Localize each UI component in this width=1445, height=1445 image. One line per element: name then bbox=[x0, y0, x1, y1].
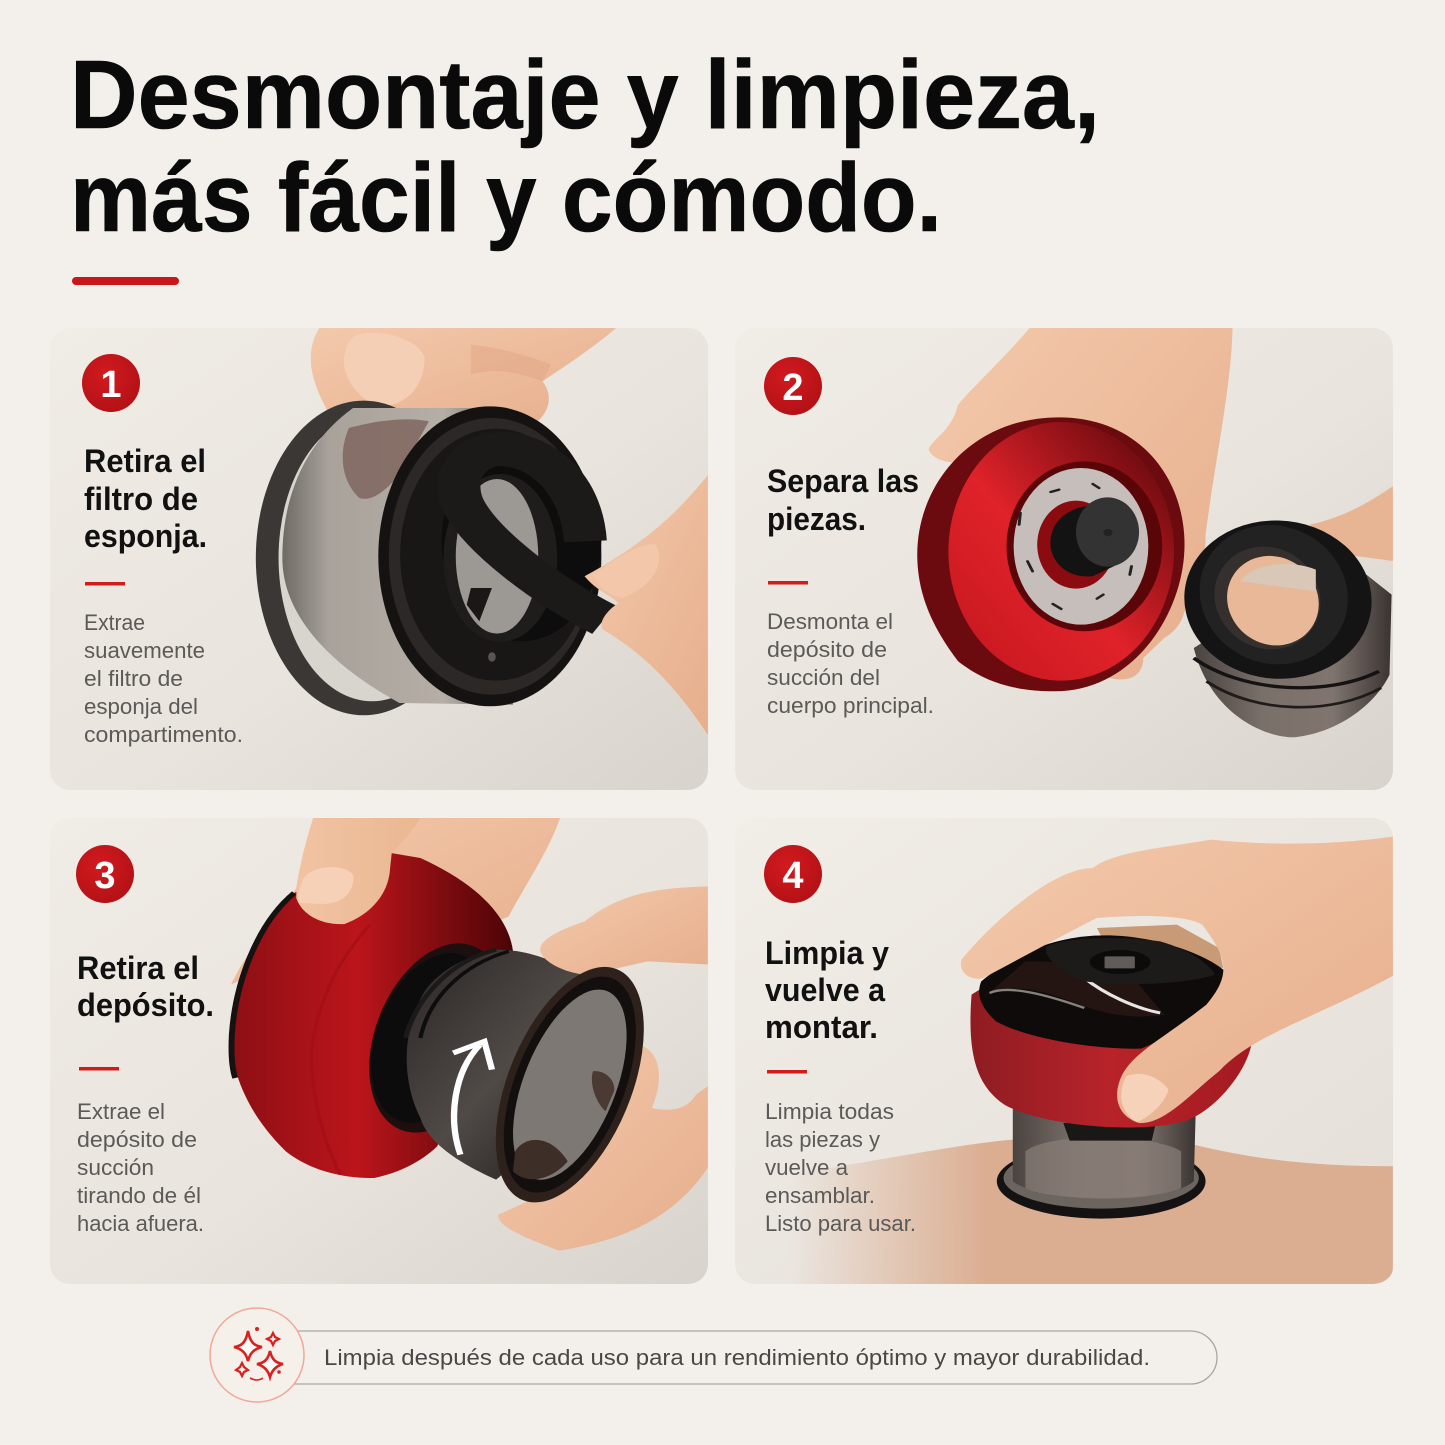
body text: step 3 bbox=[77, 1099, 204, 1236]
step number 2: 2 bbox=[782, 367, 804, 409]
body text: step 3: Extrae el bbox=[77, 1099, 165, 1124]
title bbox=[70, 40, 1100, 252]
body text: step 2: Desmonta el bbox=[767, 609, 893, 634]
heading: step 2: piezas. bbox=[767, 501, 866, 537]
icon: sparkles bbox=[210, 1308, 304, 1402]
heading: step 4: Limpia y bbox=[765, 935, 889, 971]
tip pill bbox=[270, 1331, 1217, 1384]
body text: step 1: Extrae bbox=[84, 610, 145, 635]
illustration: separating the parts bbox=[917, 328, 1395, 737]
body text: step 4: ensamblar. bbox=[765, 1183, 875, 1208]
heading: step 1: Retira el bbox=[84, 443, 206, 479]
heading: step 2: Separa las bbox=[767, 463, 919, 499]
body text: step 1 bbox=[84, 610, 243, 747]
panel: step 2 bbox=[735, 328, 1395, 790]
step number 4: 4 bbox=[782, 855, 804, 897]
panel: step 1 bbox=[50, 328, 710, 790]
step number 1: 1 bbox=[100, 364, 122, 406]
step number 4 bbox=[764, 845, 822, 903]
heading: step 3 bbox=[77, 950, 214, 1023]
body text: step 4: las piezas y bbox=[765, 1127, 880, 1152]
body text: step 2: depósito de bbox=[767, 637, 887, 662]
tip text: Limpia después de cada uso para un rendimiento óptimo y mayor durabilidad. bbox=[324, 1345, 1150, 1370]
step number 3: 3 bbox=[94, 855, 116, 897]
panel: step 4 bbox=[735, 818, 1395, 1284]
illustration: device on skin held by hand bbox=[790, 836, 1395, 1284]
accent rule bbox=[767, 1070, 807, 1074]
footer tip bbox=[210, 1308, 1217, 1402]
body text: step 1: compartimento. bbox=[84, 722, 243, 747]
heading: step 4 bbox=[765, 935, 889, 1045]
body text: step 4: Listo para usar. bbox=[765, 1211, 916, 1236]
body text: step 3: hacia afuera. bbox=[77, 1211, 204, 1236]
title: Desmontaje y limpieza, bbox=[70, 40, 1100, 149]
title accent rule bbox=[72, 277, 179, 285]
heading: step 1: esponja. bbox=[84, 518, 207, 554]
heading: step 2 bbox=[767, 463, 919, 537]
panel: step 3 bbox=[50, 818, 710, 1284]
illustration: pulling out the reservoir bbox=[231, 818, 710, 1251]
heading: step 4: vuelve a bbox=[765, 972, 885, 1008]
title: más fácil y cómodo. bbox=[70, 143, 942, 252]
step number 2 bbox=[764, 357, 822, 415]
body text: step 3: depósito de bbox=[77, 1127, 197, 1152]
body text: step 1: el filtro de bbox=[84, 666, 183, 691]
body text: step 1: esponja del bbox=[84, 694, 198, 719]
heading: step 3: depósito. bbox=[77, 987, 214, 1023]
step number 1 bbox=[82, 354, 140, 412]
body text: step 2: cuerpo principal. bbox=[767, 693, 934, 718]
body text: step 4 bbox=[765, 1099, 916, 1236]
body text: step 3: succión bbox=[77, 1155, 154, 1180]
accent rule bbox=[79, 1067, 119, 1070]
illustration: sponge filter removal bbox=[256, 328, 710, 738]
heading: step 1: filtro de bbox=[84, 481, 198, 517]
heading: step 1 bbox=[84, 443, 207, 554]
body text: step 3: tirando de él bbox=[77, 1183, 201, 1208]
body text: step 1: suavemente bbox=[84, 638, 205, 663]
body text: step 4: vuelve a bbox=[765, 1155, 849, 1180]
accent rule bbox=[768, 581, 808, 584]
body text: step 2 bbox=[767, 609, 934, 718]
step number 3 bbox=[76, 845, 134, 903]
body text: step 2: succión del bbox=[767, 665, 880, 690]
heading: step 3: Retira el bbox=[77, 950, 199, 986]
accent rule bbox=[85, 582, 125, 586]
body text: step 4: Limpia todas bbox=[765, 1099, 894, 1124]
heading: step 4: montar. bbox=[765, 1009, 878, 1045]
